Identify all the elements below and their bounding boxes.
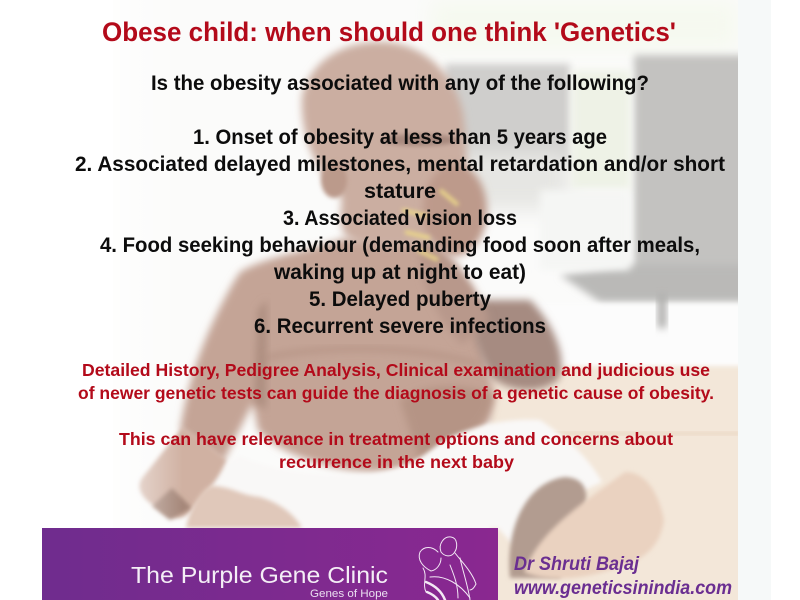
numbered list of features: 2. Associated delayed milestones, mental retardation and/or short	[75, 153, 725, 176]
dark right arm	[467, 300, 561, 390]
relevance statement: This can have relevance in treatment options and concerns about	[119, 429, 673, 449]
baby diaper	[362, 418, 602, 542]
numbered list of features	[75, 126, 725, 338]
doctor credit: www.geneticsinindia.com	[514, 578, 732, 599]
numbered list of features: 4. Food seeking behaviour (demanding food soon after meals,	[100, 234, 700, 257]
tagline: Genes of Hope	[310, 588, 388, 600]
clinic name: The Purple Gene Clinic	[131, 562, 388, 588]
diagnosis statement: of newer genetic tests can guide the diagnosis of a genetic cause of obesity.	[78, 383, 714, 403]
numbered list of features: 6. Recurrent severe infections	[254, 315, 546, 338]
diagnosis statement	[78, 360, 714, 403]
left fade	[138, 444, 176, 520]
arm and torso	[180, 238, 495, 472]
clinic banner	[42, 528, 498, 600]
doctor credit: Dr Shruti Bajaj	[514, 554, 640, 575]
icon: mother and child logo	[419, 537, 476, 600]
baby right foot	[509, 472, 664, 579]
baby body	[180, 235, 561, 472]
baby head	[302, 42, 487, 260]
right margin strip	[738, 0, 771, 600]
numbered list of features: 1. Onset of obesity at less than 5 years age	[193, 126, 607, 149]
doctor credit	[514, 554, 732, 599]
baby hand	[139, 428, 226, 518]
numbered list of features: 3. Associated vision loss	[283, 207, 517, 230]
numbered list of features: 5. Delayed puberty	[309, 288, 491, 311]
baby left foot	[186, 486, 302, 528]
relevance statement: recurrence in the next baby	[279, 452, 514, 472]
room backdrop	[430, 0, 754, 600]
relevance statement	[119, 429, 673, 472]
numbered list of features: waking up at night to eat)	[273, 261, 526, 284]
numbered list of features: stature	[364, 180, 436, 203]
diagnosis statement: Detailed History, Pedigree Analysis, Clinical examination and judicious use	[82, 360, 710, 380]
title: Obese child: when should one think 'Genetics'	[102, 17, 676, 47]
question heading: Is the obesity associated with any of the following?	[151, 72, 649, 95]
